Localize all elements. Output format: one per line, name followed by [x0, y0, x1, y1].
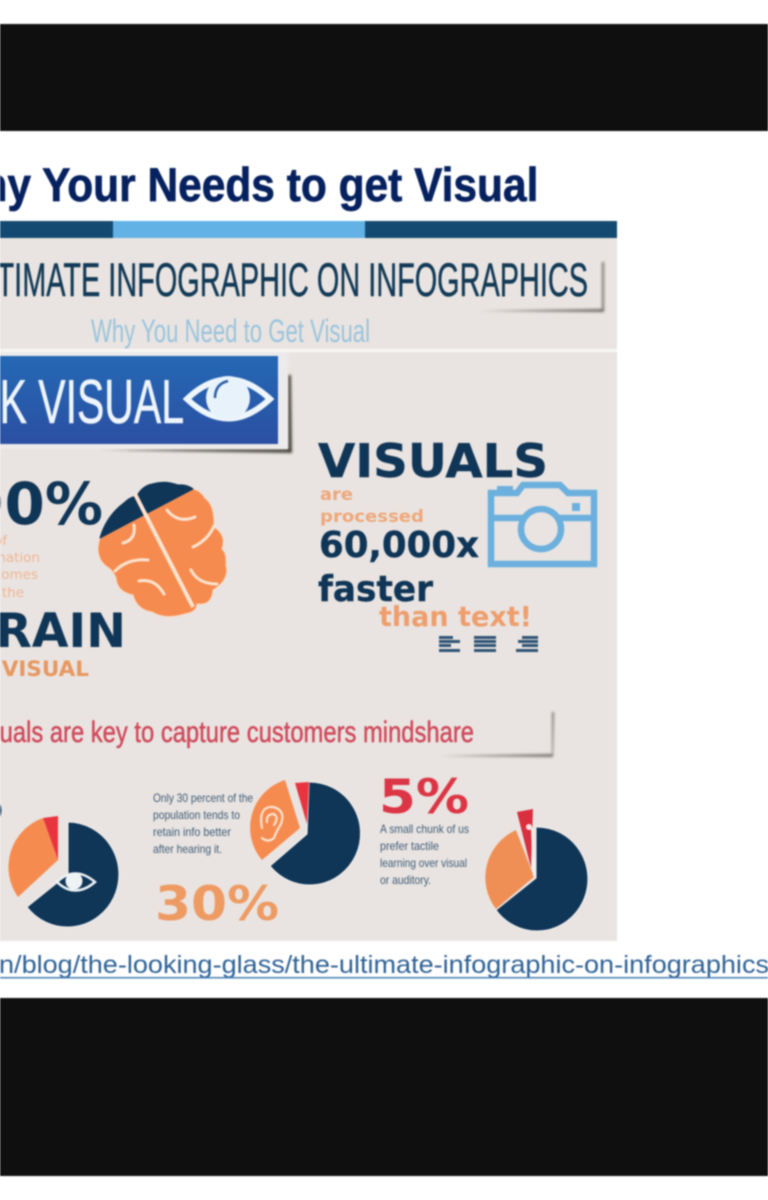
text: are processed: are — [320, 485, 353, 504]
text: tactile description: learning over visual — [380, 856, 467, 870]
headline: visuals: VISUALS — [318, 434, 548, 488]
text: hearing description: after hearing it. — [153, 842, 222, 856]
icon: ear — [261, 807, 282, 840]
think visual banner — [0, 352, 292, 453]
subtitle: Why You Need to Get Visual — [91, 313, 370, 349]
caption: of information comes to the — [0, 533, 40, 601]
text: hearing description: retain info better — [153, 825, 231, 839]
panel: infographic background — [0, 238, 617, 941]
icon: text alignment lines — [439, 636, 538, 652]
stat: 60,000x: 60,000x — [319, 525, 479, 566]
icon: eye in pie — [57, 872, 95, 890]
text: hearing description — [153, 791, 253, 856]
text: tactile description: prefer tactile — [380, 839, 439, 853]
text: than text: than text! — [379, 600, 532, 633]
pie chart: visual — [8, 816, 119, 927]
pie chart: hearing — [250, 780, 361, 885]
icon: eye — [187, 376, 270, 420]
text: tactile description — [380, 822, 469, 887]
section banner: mindshare — [0, 712, 554, 757]
stat: 5 percent: 5% — [379, 770, 469, 825]
text: faster: faster — [318, 569, 433, 610]
cropped stat fragment — [0, 804, 2, 817]
source link: n/blog/the-looking-glass/the-ultimate-infographic-on-infographics — [0, 951, 768, 979]
divider band — [0, 349, 617, 352]
pie chart: tactile — [485, 809, 588, 931]
text: hearing description: Only 30 percent of the — [153, 791, 253, 805]
top black bar — [0, 24, 768, 131]
icon: camera — [491, 485, 594, 564]
stat: 30 percent: 30% — [155, 877, 279, 932]
text: tactile description: A small chunk of us — [380, 822, 469, 836]
bottom black bar — [0, 998, 768, 1176]
text: tactile description: or auditory. — [380, 873, 431, 887]
text: are processed: processed — [320, 507, 424, 526]
text: hearing description: population tends to — [153, 808, 240, 822]
icon: brain — [98, 482, 227, 617]
tri-colour header bar — [0, 221, 617, 238]
stat: 90 percent — [0, 470, 126, 682]
text: are processed — [320, 485, 424, 526]
